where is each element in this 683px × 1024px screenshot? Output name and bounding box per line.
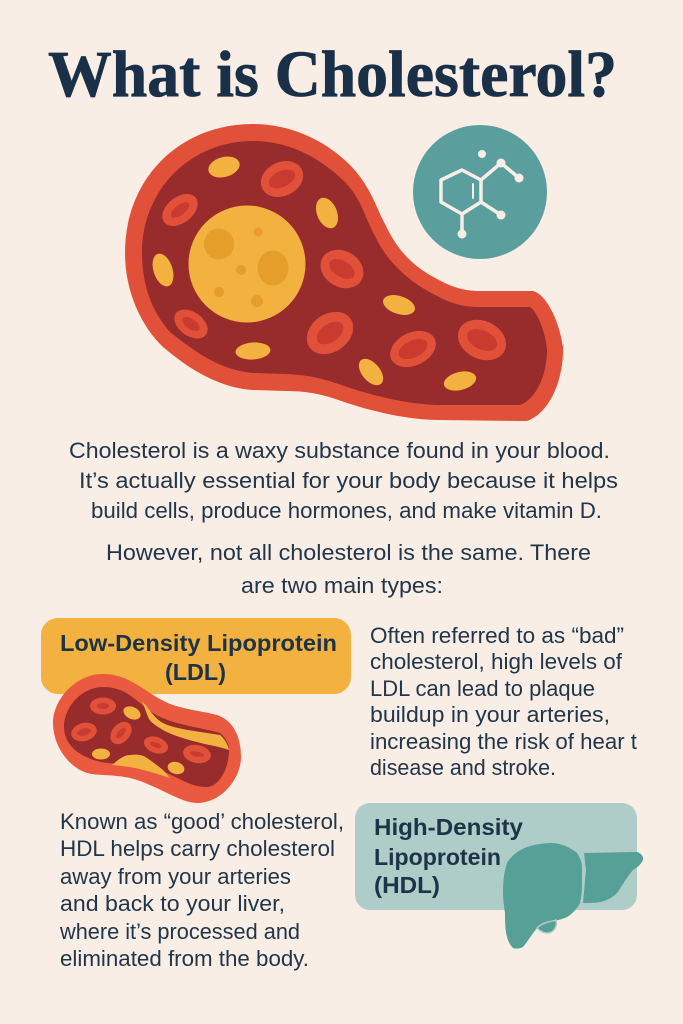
plaque deposits	[112, 701, 229, 778]
text: LDL description: cholesterol, high levels of	[370, 649, 623, 674]
text: HDL description: where it’s processed and	[59, 919, 300, 944]
panel: LDL heading	[41, 618, 351, 694]
panel: HDL heading: High-Density	[374, 814, 523, 840]
text: HDL description: Known as “good’ cholesterol,	[60, 809, 344, 834]
text: LDL description: disease and stroke.	[370, 755, 556, 780]
icon: liver	[503, 843, 643, 949]
vessel interior	[142, 141, 547, 405]
panel: HDL heading: (HDL)	[374, 872, 440, 898]
text: two main types: However, not all cholesterol is the same. There	[106, 540, 591, 565]
cholesterol plaque	[188, 206, 306, 322]
text: introduction	[69, 438, 618, 523]
text: HDL description: away from your arteries	[60, 864, 291, 889]
title: What is Cholesterol?	[48, 38, 617, 111]
panel: HDL heading: Lipoprotein	[374, 844, 501, 870]
text: HDL description	[59, 809, 344, 971]
text: introduction: Cholesterol is a waxy substance found in your blood.	[69, 438, 610, 463]
text: HDL description: eliminated from the body.	[60, 946, 309, 971]
text: LDL description: buildup in your arteries,	[370, 702, 610, 727]
text: introduction: build cells, produce hormones, and make vitamin D.	[91, 498, 602, 523]
illustration: artery with LDL plaque	[53, 674, 241, 803]
panel: HDL heading	[355, 803, 637, 910]
text: LDL description: increasing the risk of hear t	[370, 729, 637, 754]
vessel wall	[125, 124, 563, 421]
text: LDL description	[370, 623, 637, 780]
red blood cells	[156, 154, 513, 374]
text: two main types: are two main types:	[241, 573, 443, 598]
text: HDL description: HDL helps carry cholesterol	[60, 836, 335, 861]
illustration: blood vessel with cholesterol	[125, 124, 563, 421]
icon: molecule badge	[413, 125, 547, 259]
panel: LDL heading: (LDL)	[165, 659, 226, 685]
text: two main types	[106, 540, 591, 598]
gallbladder	[537, 920, 556, 933]
text: LDL description: Often referred to as “bad”	[370, 623, 624, 648]
panel: LDL heading: Low-Density Lipoprotein	[60, 630, 337, 656]
text: HDL description: and back to your liver,	[60, 891, 285, 916]
yellow platelets	[149, 153, 478, 394]
text: introduction: It’s actually essential for your body because it helps	[79, 468, 618, 493]
text: LDL description: LDL can lead to plaque	[370, 676, 595, 701]
blood cells	[69, 698, 212, 776]
